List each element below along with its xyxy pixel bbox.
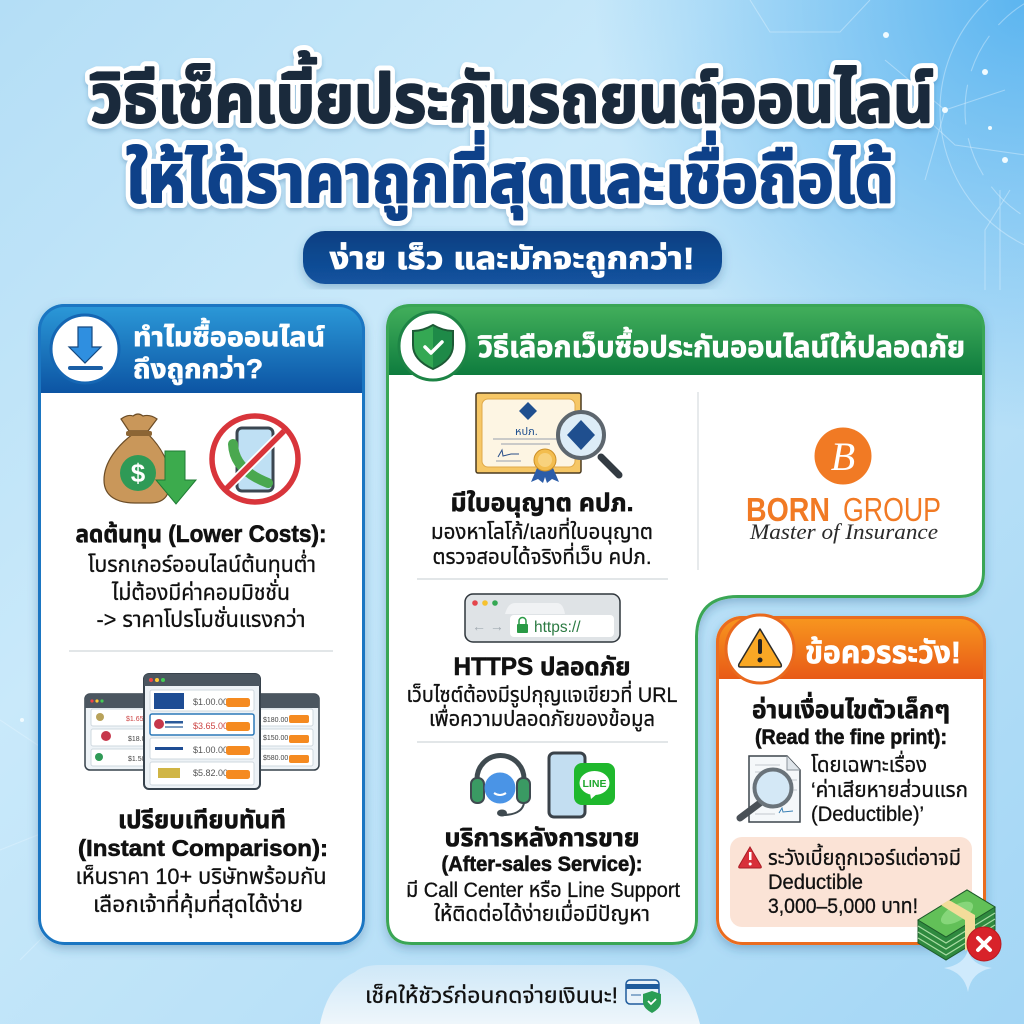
icon: licence certificate with magnifier: [476, 393, 619, 483]
text: licence: [431, 489, 653, 569]
text: read the fine print: อ่านเงื่อนไขตัวเล็กๆ: [752, 692, 950, 724]
callout: deductible warning: [730, 837, 972, 927]
subtitle pill: [303, 231, 722, 284]
icon: phone with LINE: LINE: [582, 779, 607, 790]
text: deductible note: โดยเฉพาะเรื่อง: [811, 750, 927, 777]
text: licence: มองหาโลโก้/เลขที่ใบอนุญาต: [431, 517, 653, 545]
text: licence: ตรวจสอบได้จริงที่เว็บ คปภ.: [432, 542, 652, 569]
text: https: เพื่อความปลอดภัยของข้อมูล: [429, 704, 655, 732]
logo: Born Group: BORN: [746, 491, 830, 528]
window: back left: $1.65: [126, 716, 144, 723]
icon: warning badge: [726, 615, 794, 683]
text: https: เว็บไซต์ต้องมีรูปกุญแจเขียวที่ URL: [406, 680, 678, 708]
text: deductible note: ‘ค่าเสียหายส่วนแรก: [811, 778, 968, 802]
window: back right: [245, 694, 319, 770]
window: front: $1.00.00: [193, 697, 228, 707]
illustration: price comparison windows: [85, 674, 319, 789]
icon: download arrow badge: [51, 315, 119, 383]
window: back right: $180.00: [263, 717, 288, 724]
text: licence: มีใบอนุญาต คปภ.: [450, 489, 634, 518]
window: back left: [85, 694, 175, 770]
panel: caution: [716, 615, 986, 945]
logo: Born Group: Master of Insurance: [749, 519, 938, 544]
text: read the fine print: [752, 692, 950, 749]
icon: browser https: [465, 594, 620, 642]
text: lower costs: ไม่ต้องมีค่าคอมมิชชั่น: [111, 578, 290, 605]
text: after sales: ให้ติดต่อได้ง่ายเมื่อมีปัญหา: [434, 899, 650, 926]
title line 2: ให้ได้ราคาถูกที่สุดและเชื่อถือได้: [126, 131, 894, 220]
title line 1: วิธีเช็คเบี้ยประกันรถยนต์ออนไลน์: [90, 51, 934, 137]
icon: red warning triangle: [739, 847, 761, 868]
text: deductible note: (Deductible)’: [811, 803, 924, 826]
window: back right: $150.00: [263, 735, 288, 742]
callout: deductible warning: Deductible: [768, 871, 863, 894]
icon: browser https: ← →: [472, 618, 504, 634]
text: lower costs: ลดต้นทุน (Lower Costs):: [76, 520, 326, 549]
title line 2: ให้ได้ราคาถูกที่สุดและเชื่อถือได้: [126, 131, 894, 220]
text: instant comparison: เห็นราคา 10+ บริษัทพร้อมกัน: [76, 864, 326, 889]
callout: deductible warning: 3,000–5,000 บาท!: [768, 895, 918, 918]
window: front: $3.65.00: [193, 721, 228, 731]
logo: Born Group: B: [831, 434, 855, 479]
text: lower costs: -> ราคาโปรโมชั่นแรงกว่า: [96, 605, 306, 632]
text: instant comparison: เลือกเจ้าที่คุ้มที่สุดได้ง่าย: [93, 889, 303, 918]
icon: licence certificate with magnifier: หปภ.: [515, 426, 538, 438]
icon: no phone calls: [212, 416, 298, 502]
panel header: blue: [38, 304, 365, 393]
panel heading: ถึงถูกกว่า?: [133, 354, 263, 385]
subtitle pill: ง่าย เร็ว และมักจะถูกกว่า!: [330, 241, 694, 277]
text: after sales: บริการหลังการขาย: [444, 824, 640, 852]
logo: Born Group: [746, 428, 941, 544]
text: instant comparison: เปรียบเทียบทันที: [118, 806, 286, 834]
icon: money bag with down arrow: $: [131, 458, 146, 488]
text: instant comparison: (Instant Comparison):: [78, 835, 328, 861]
footer banner: เช็คให้ชัวร์ก่อนกดจ่ายเงินนะ!: [365, 983, 618, 1008]
text: instant comparison: [76, 806, 328, 918]
text: deductible note: [811, 750, 968, 826]
panel header: orange: [716, 616, 986, 679]
text: read the fine print: (Read the fine print):: [755, 726, 947, 749]
footer banner: [320, 965, 700, 1024]
callout: deductible warning: ระวังเบี้ยถูกเวอร์แต่อาจมี: [768, 843, 961, 871]
icon: shield badge: [399, 312, 467, 380]
window: back right: $580.00: [263, 755, 288, 762]
text: after sales: (After-sales Service):: [442, 853, 642, 876]
panel heading: วิธีเลือกเว็บซื้อประกันออนไลน์ให้ปลอดภัย: [478, 326, 965, 364]
text: lower costs: [76, 520, 326, 632]
window: front: $5.82.00: [193, 768, 228, 778]
icon: phone with LINE: [549, 753, 615, 817]
panel: why buying online is cheaper: [38, 304, 365, 945]
panel heading: ทำไมซื้อออนไลน์: [133, 318, 325, 352]
title: [90, 51, 934, 220]
panel header: green: [386, 304, 985, 375]
text: lower costs: โบรกเกอร์ออนไลน์ต้นทุนต่ำ: [88, 549, 316, 578]
icon: document with magnifier: [740, 756, 800, 822]
window: back left: $1.50: [128, 756, 146, 763]
icon: headset support: [471, 755, 530, 816]
icon: money bag with down arrow: [104, 414, 196, 504]
window: back left: $18.0: [128, 736, 146, 743]
panel heading: ข้อควรระวัง!: [805, 635, 961, 670]
title line 1: วิธีเช็คเบี้ยประกันรถยนต์ออนไลน์: [90, 51, 934, 137]
logo: Born Group: GROUP: [843, 491, 941, 528]
text: https: [406, 653, 678, 732]
icon: card with shield: [626, 980, 661, 1013]
text: https: HTTPS ปลอดภัย: [454, 653, 630, 681]
panel heading: [133, 318, 325, 385]
text: after sales: [406, 824, 680, 926]
window: front: [144, 674, 260, 789]
text: after sales: มี Call Center หรือ Line Support: [406, 879, 680, 902]
panel: how to choose a safe site: [386, 304, 985, 945]
icon: stack of cash with X: [918, 890, 1001, 961]
icon: browser https: https://: [534, 619, 581, 636]
decorative sparkle: [944, 950, 992, 992]
window: front: $1.00.00: [193, 745, 228, 755]
